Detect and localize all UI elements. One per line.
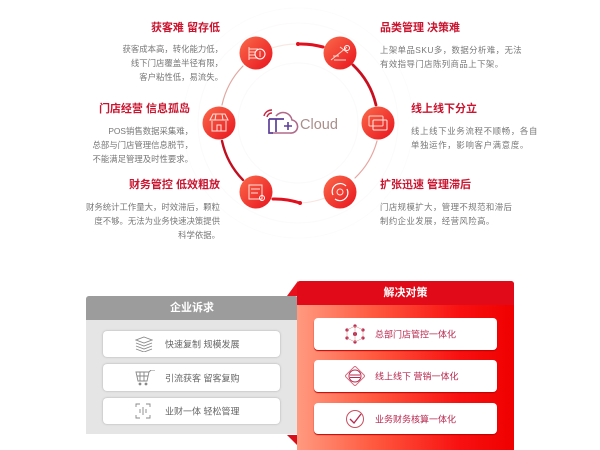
card: HQ store integration — [314, 318, 497, 350]
text: category management: 上架单品SKU多，数据分析难，无法 — [380, 45, 522, 55]
card: rapid replication: 快速复制 规模发展 — [165, 340, 240, 350]
text: finance control — [86, 178, 220, 240]
text: store information silos: 门店经营 信息孤岛 — [99, 103, 190, 115]
logo: cloud — [264, 110, 338, 133]
text: acquisition difficulty — [122, 22, 223, 82]
fold: bottom triangle — [287, 435, 297, 445]
text: store information silos: 总部与门店管理信息脱节， — [92, 140, 193, 150]
text: online offline separation: 线上线下业务流程不顺畅，各自 — [411, 126, 538, 136]
icon: storefront — [202, 106, 236, 140]
heading: enterprise demands — [86, 296, 298, 320]
text: store information silos — [92, 102, 193, 164]
text: acquisition difficulty: 获客成本高，转化能力低， — [122, 44, 223, 54]
text: store information silos: 不能满足管理及时性要求。 — [92, 154, 193, 164]
text: finance control: 财务统计工作量大，时效滞后，颗粒 — [86, 202, 220, 212]
panel: enterprise demands — [86, 296, 298, 434]
icon: category network — [324, 36, 356, 70]
text: category management — [380, 22, 522, 69]
icon: acquisition coins — [240, 36, 272, 70]
card: HQ store integration: 总部门店管控一体化 — [375, 330, 456, 340]
text: finance control: 财务管控 低效粗放 — [129, 179, 220, 191]
logo: cloud: Cloud — [300, 117, 338, 133]
text: finance control: 科学依据。 — [178, 230, 220, 240]
text: category management: 有效指导门店陈列商品上下架。 — [380, 59, 504, 69]
heading: solutions — [297, 281, 514, 305]
text: category management: 品类管理 决策难 — [380, 22, 460, 34]
ring diagram — [202, 36, 394, 208]
text: acquisition difficulty: 客户粘性低，易流失。 — [139, 72, 223, 82]
card: rapid replication — [103, 331, 280, 357]
card: business finance accounting: 业务财务核算一体化 — [375, 414, 456, 424]
text: online offline separation — [411, 102, 538, 150]
card: traffic and repurchase — [103, 364, 280, 391]
text: rapid expansion: 扩张迅速 管理滞后 — [380, 179, 471, 191]
text: online offline separation: 单独运作，影响客户满意度。 — [411, 140, 529, 150]
card: integrated finance: 业财一体 轻松管理 — [165, 406, 240, 416]
text: online offline separation: 线上线下分立 — [411, 103, 477, 115]
card: online offline marketing — [314, 360, 497, 392]
text: acquisition difficulty: 线下门店覆盖半径有限， — [131, 58, 223, 68]
card: online offline marketing: 线上线下 营销一体化 — [375, 372, 459, 382]
text: store information silos: POS销售数据采集难， — [108, 126, 193, 136]
text: rapid expansion: 制约企业发展，经营风险高。 — [380, 216, 495, 226]
card: traffic and repurchase: 引流获客 留客复购 — [165, 373, 240, 383]
icon: online offline screens — [362, 106, 394, 140]
text: rapid expansion — [380, 178, 512, 226]
heading: solutions: 解决对策 — [384, 287, 428, 299]
text: finance control: 度不够。无法为业务快速决策提供 — [94, 216, 220, 226]
text: rapid expansion: 门店规模扩大，管理不规范和滞后 — [380, 202, 512, 212]
card: business finance accounting — [314, 403, 497, 434]
fold: top triangle — [287, 281, 298, 296]
text: acquisition difficulty: 获客难 留存低 — [151, 22, 220, 34]
icon: finance report — [240, 176, 272, 208]
heading: enterprise demands: 企业诉求 — [170, 302, 214, 314]
icon: expansion cycle — [324, 176, 356, 208]
card: integrated finance — [103, 398, 280, 424]
panel: solutions — [297, 281, 514, 450]
